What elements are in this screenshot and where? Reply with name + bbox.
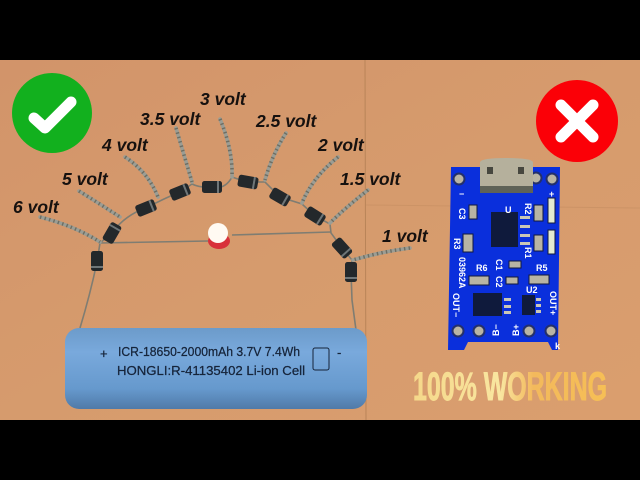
silkscreen labels: + [549,189,554,199]
silkscreen labels: C1 [494,259,504,271]
silkscreen labels: k [555,341,561,351]
voltage labels: 1 volt [382,226,429,246]
battery: + [100,346,108,361]
icon: red cross [536,80,618,162]
battery: HONGLI:R-41135402 Li-ion Cell [117,364,305,378]
silkscreen labels: − [459,189,464,199]
silkscreen labels: R2 [523,203,533,215]
chip pins [504,216,541,314]
voltage labels: 6 volt [13,197,60,217]
SMD parts [463,198,555,285]
icon: green check mark [12,73,92,153]
silkscreen labels: R1 [523,247,533,259]
top black bar [0,0,640,60]
voltage labels: 5 volt [62,169,109,189]
silkscreen labels: R5 [536,263,548,273]
voltage labels: 2.5 volt [255,111,317,131]
voltage labels: 4 volt [101,135,149,155]
silkscreen labels: R6 [476,263,488,273]
paper background [0,60,640,420]
mounting pads [452,172,558,336]
battery: - [337,345,341,360]
silkscreen labels: U [505,205,512,215]
silkscreen labels [451,189,561,351]
silkscreen labels: U2 [526,285,538,295]
silkscreen labels: OUT+ [548,291,558,315]
diode ladder circuit [40,119,410,330]
silkscreen labels: R3 [452,238,462,250]
silkscreen labels: B− [491,324,501,336]
chips [491,212,518,247]
lead wires [80,177,356,330]
battery: ICR-18650-2000mAh 3.7V 7.4Wh [118,345,300,359]
silkscreen labels: C2 [494,276,504,288]
voltage labels [13,89,429,246]
bottom black bar [0,420,640,480]
voltage labels: 2 volt [317,135,365,155]
voltage labels: 3.5 volt [140,109,201,129]
silkscreen labels: OUT− [451,293,461,317]
silkscreen labels: C3 [457,208,467,220]
voltage labels: 3 volt [200,89,247,109]
charger board [448,158,561,351]
LED wire left [100,241,208,243]
silkscreen labels: B+ [511,324,521,336]
LED [208,223,230,249]
silkscreen labels: 03962A [457,257,467,289]
battery [65,328,367,409]
micro USB connector [480,158,533,193]
twisted tap wires [40,119,410,260]
voltage labels: 1.5 volt [340,169,401,189]
diodes [91,174,357,282]
LED wire right [232,232,331,235]
